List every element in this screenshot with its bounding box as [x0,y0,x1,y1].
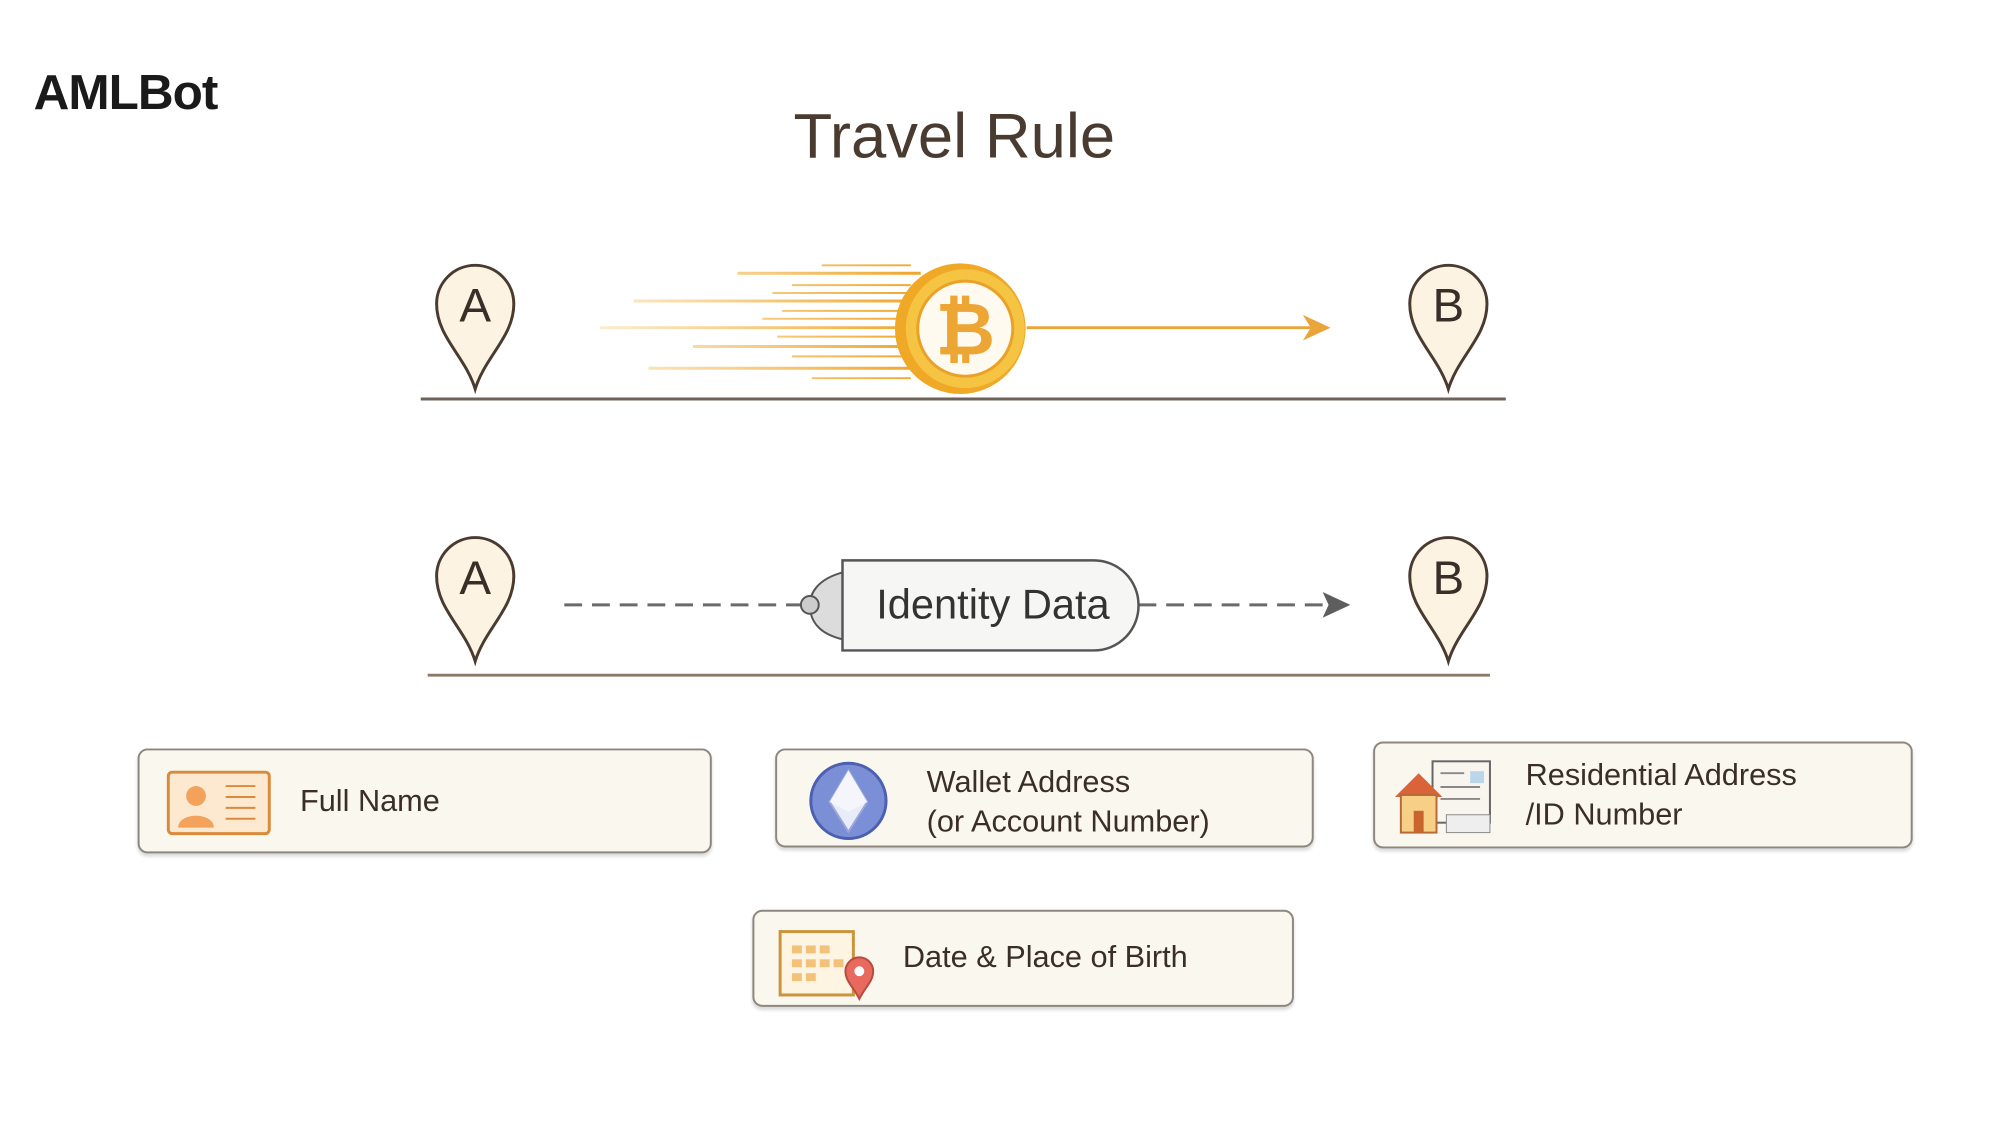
card: date & place of birth [752,910,1294,1007]
card: full name [138,748,712,853]
diagram [420,263,1506,677]
icon: ethereum [809,762,888,840]
pin B: B [1433,552,1464,605]
card: wallet address: Wallet Address [927,764,1130,799]
bitcoin coin: ₿ [935,288,995,370]
pin B [1410,265,1487,389]
pin B [1410,538,1487,661]
pin B: B [1433,280,1464,333]
title: Travel Rule [794,100,1115,171]
speed lines [600,265,921,378]
dashed arrow [564,603,1327,606]
pin A [437,538,514,661]
orange arrow [1027,315,1331,341]
pin A: A [459,280,491,333]
identity data capsule: Identity Data [876,581,1111,628]
card: wallet address: (or Account Number) [927,804,1210,839]
bitcoin coin [895,263,1026,394]
logo: AMLBot: AMLBot [34,64,217,120]
pin A [437,265,514,389]
icon: ID card [166,770,271,836]
card: residential address: /ID Number [1526,797,1682,832]
card: residential address: Residential Address [1526,757,1797,792]
pin A: A [459,552,491,605]
row 2: identity data [428,538,1490,675]
icon: house with documents [1395,760,1491,834]
identity data capsule [801,560,1139,650]
card: date & place of birth: Date & Place of Birth [903,940,1188,974]
card: full name: Full Name [300,783,440,818]
icon: calendar with pin [778,930,874,1001]
card: residential address [1373,742,1913,848]
card: wallet address [775,748,1314,847]
row 1: bitcoin transfer [421,263,1506,399]
